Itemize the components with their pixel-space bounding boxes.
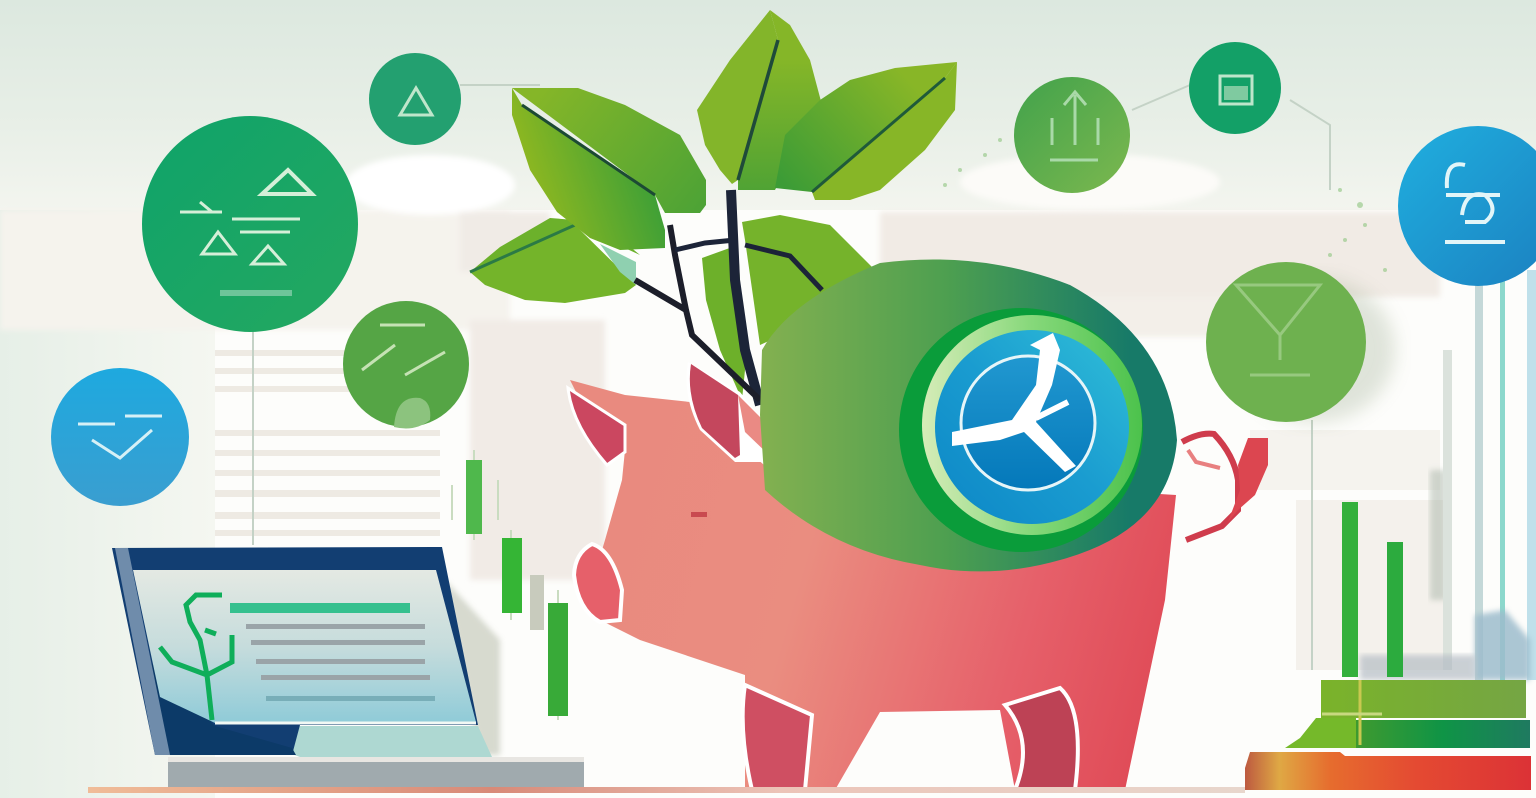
pig: far ear: [568, 388, 625, 465]
laptop: text lines: [230, 603, 435, 701]
leaf: top: [697, 10, 822, 190]
pig: eye: [691, 512, 707, 517]
laptop: sprout icon: [160, 595, 232, 720]
icon circle: faded green goblet: [1206, 262, 1395, 422]
pig: tail: [1182, 434, 1268, 540]
icon circle: blue check: [51, 368, 189, 506]
laptop: keyboard deck: [215, 726, 492, 757]
stacked green bars right: [1245, 502, 1531, 790]
pig: near ear: [686, 362, 772, 462]
thin connector lines: [253, 85, 1330, 670]
leaf: far left: [470, 218, 640, 303]
decorative dotted trail: [943, 138, 1387, 272]
green bars: left candlesticks: [452, 450, 568, 720]
leaf: upper right: [775, 62, 957, 200]
icon circle: leaf green chart: [343, 301, 469, 428]
dial: light ring: [922, 315, 1142, 535]
pig: body: [570, 380, 1176, 790]
icon circle: green pillars: [1014, 77, 1130, 193]
dial: white hands: [952, 333, 1076, 472]
pig: snout: [574, 544, 622, 622]
pig body: [568, 362, 1268, 790]
icon circle: blue top right: [1398, 126, 1536, 286]
green saddle on pig: [760, 259, 1177, 571]
icon circle: calendar green: [1189, 42, 1281, 134]
dial: blue face: [935, 330, 1129, 524]
laptop: shadow: [445, 580, 500, 755]
laptop: lid: [112, 547, 478, 755]
dial: outer ring: [899, 308, 1143, 552]
pig: front leg: [743, 685, 812, 790]
plant stem and leaves: [470, 10, 957, 405]
pig: rear leg: [1005, 688, 1078, 790]
branches: [731, 190, 760, 405]
coin dial: [899, 308, 1143, 552]
leaf: lower right: [702, 215, 880, 400]
leaf: upper left: [512, 88, 706, 250]
ground line: [88, 787, 1245, 793]
laptop: screen: [133, 570, 476, 723]
icon circle: large green balance chart: [142, 116, 358, 332]
icon circle: small green top left: [369, 53, 461, 145]
laptop: base: [168, 762, 584, 787]
shadow and glass bars right: [1360, 270, 1536, 680]
laptop: [112, 547, 584, 787]
